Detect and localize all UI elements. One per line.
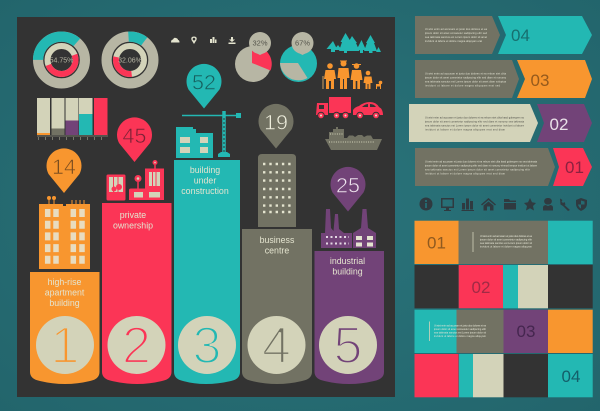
chart: pie 32%: 32% bbox=[252, 38, 268, 48]
bar 3: building under construction: 3 bbox=[193, 317, 221, 375]
pin: 25 bbox=[330, 167, 366, 212]
chart: donut 2: 32.06% bbox=[118, 58, 142, 64]
pin: 45: 45 bbox=[123, 124, 146, 148]
icon: star bbox=[524, 198, 536, 210]
grid row 3 bbox=[414, 310, 593, 353]
icon: person bbox=[543, 198, 553, 210]
grid row 1: ipsum dolor sit amet consetetur sadipscing elitr bbox=[480, 238, 532, 242]
arrow row 01: sea takimata sanctus est Lorem ipsum dolor sit amet consetetur sadipscing elitr bbox=[425, 168, 530, 172]
arrow row 04: 04 bbox=[511, 26, 530, 45]
icon: factory bbox=[321, 209, 376, 248]
icon: small bars bbox=[210, 37, 216, 43]
icon row bbox=[420, 198, 587, 211]
arrow row 01: ipsum dolor sit amet consetetur sadipscing elitr sed diam et nonumy eirmod tempor invidunt ut labore bbox=[425, 164, 538, 168]
bar 2: private ownership: ownership bbox=[113, 220, 153, 230]
chart: pie 32% bbox=[235, 32, 272, 82]
arrow row 01 bbox=[415, 148, 592, 186]
icon: location bbox=[191, 36, 197, 44]
grid row 3: Ut wisi enim ad accusam et justo duo dolores et ea bbox=[434, 324, 487, 328]
pin: 25: 25 bbox=[336, 174, 360, 198]
grid row 2 bbox=[414, 265, 593, 308]
arrow row 04: ipsum dolor sit amet consetetur sadipscing elitr sed bbox=[425, 32, 488, 35]
arrow row 02: invidunt ut labore et dolore magna aliquyam erat sed diam bbox=[425, 128, 505, 132]
icon: home bbox=[481, 198, 496, 210]
pin: 45 bbox=[117, 117, 152, 162]
chart: donut 2 bbox=[106, 36, 154, 84]
icon: apartment building bbox=[39, 196, 90, 269]
bar 2: private ownership: private bbox=[120, 210, 146, 220]
panel: dark chart panel bbox=[17, 17, 395, 397]
bar 4: business centre: business bbox=[260, 235, 295, 245]
arrow row 02: sea takimata sanctus est Lorem ipsum dolor sit amet consetetur invidunt ut labore bbox=[425, 124, 525, 128]
icon: truck bbox=[316, 97, 351, 119]
chart: stacked bars bbox=[37, 98, 108, 138]
icon: building and crane bbox=[176, 111, 241, 158]
bar 1: high-rise apartment building: 1 bbox=[51, 317, 79, 375]
bar 4: business centre: centre bbox=[265, 246, 289, 256]
arrow row 02: ipsum dolor sit amet consetetur sadipscing elitr sed diam et nonumy sea takimata bbox=[425, 120, 525, 124]
arrow row 03: ipsum dolor sit amet consetetur sadipscing elitr sed diam et nonumy bbox=[425, 76, 507, 80]
grid row 1: Ut wisi enim ad accusam et justo duo dolores et ea bbox=[480, 235, 533, 238]
bar 2: private ownership: 2 bbox=[122, 317, 151, 375]
arrow row 02: Ut wisi enim ad accusam et justo duo dolores et ea rebum stet clita kasd gubergren no bbox=[425, 116, 525, 120]
arrow row 04 bbox=[415, 16, 592, 54]
bar 1: high-rise apartment building: high-rise bbox=[48, 277, 81, 287]
icon: download bbox=[228, 37, 236, 44]
arrow row 01: Ut wisi enim ad accusam et justo duo dolores et ea rebum stet clita kasd gubergren no sea takimata bbox=[425, 160, 538, 164]
icon: trees bbox=[326, 33, 381, 53]
chart: pie 67%: 67% bbox=[295, 38, 310, 48]
pin: 52 bbox=[186, 64, 222, 108]
grid row 4 bbox=[414, 354, 593, 397]
icon: folder bbox=[504, 199, 516, 210]
icon: ship bbox=[325, 127, 382, 150]
grid row 3: invidunt ut labore et dolore magna aliquyam bbox=[434, 335, 486, 338]
icon: business tower bbox=[258, 154, 296, 227]
bar 3: building under construction: building bbox=[190, 165, 220, 175]
bar 5: industrial building: industrial bbox=[330, 256, 365, 266]
bar 1: high-rise apartment building: building bbox=[49, 298, 80, 308]
bar 2: private ownership bbox=[102, 203, 172, 384]
grid row 1 bbox=[414, 221, 593, 264]
arrow row 04: sea takimata sanctus est Lorem ipsum dolor sit amet bbox=[425, 36, 487, 39]
pin: 19: 19 bbox=[264, 110, 288, 134]
pin: 19 bbox=[258, 104, 294, 148]
icon: info bbox=[420, 198, 432, 210]
arrow row 01: 01 bbox=[565, 158, 584, 177]
grid row 3: sea takimata sanctus est Lorem ipsum dolor sit bbox=[434, 332, 486, 334]
pin: 52: 52 bbox=[192, 70, 216, 94]
chart: donut 1: 54.75% bbox=[50, 58, 73, 64]
bar 5: industrial building: building bbox=[332, 266, 363, 276]
chart: donut 1 bbox=[37, 36, 86, 84]
bar 4: business centre bbox=[242, 229, 312, 384]
arrow row 04: Ut wisi enim ad accusam et justo duo dolores et ea bbox=[425, 28, 488, 31]
icon: private houses bbox=[106, 160, 164, 200]
arrow row 03: invidunt ut labore et dolore magna aliquyam erat sed bbox=[425, 84, 501, 88]
icon: wrench bbox=[560, 198, 570, 211]
arrow row 04: invidunt ut labore et dolore magna aliquyam erat bbox=[425, 40, 482, 43]
bar 5: industrial building: 5 bbox=[334, 317, 362, 375]
arrow row 01: invidunt ut labore et dolore magna aliquyam erat sed diam bbox=[425, 172, 505, 176]
pin: 14 bbox=[46, 148, 82, 193]
grid row 1: sea takimata sanctus est Lorem ipsum dolor sit bbox=[480, 242, 532, 245]
grid row 4: 04 bbox=[562, 367, 580, 386]
bar 4: business centre: 4 bbox=[262, 317, 291, 375]
arrow row 03: sea takimata sanctus est Lorem ipsum dolor sit amet diam voluptua bbox=[425, 80, 507, 84]
arrow row 03: Ut wisi enim ad accusam et justo duo dolores et ea rebum stet clita bbox=[425, 72, 507, 76]
chart: pie 67% bbox=[280, 32, 317, 82]
icon: monitor bbox=[441, 198, 454, 211]
grid row 2: 02 bbox=[472, 278, 490, 297]
bar 3: building under construction: construction bbox=[181, 186, 229, 196]
arrow row 03 bbox=[415, 60, 592, 98]
arrow row 03: 03 bbox=[531, 71, 549, 90]
arrow row 02 bbox=[409, 104, 592, 142]
bar 3: building under construction bbox=[174, 160, 240, 384]
icon: car bbox=[353, 102, 383, 119]
grid row 3: 03 bbox=[517, 322, 535, 341]
pin: 14: 14 bbox=[52, 155, 76, 179]
bar 5: industrial building bbox=[314, 251, 384, 384]
icon: cloud bbox=[171, 38, 180, 42]
arrow row 02: 02 bbox=[550, 115, 568, 134]
bar 1: high-rise apartment building: apartment bbox=[45, 288, 85, 298]
grid row 1: invidunt ut labore et dolore magna aliquyam bbox=[480, 246, 532, 248]
grid row 1: 01 bbox=[427, 234, 446, 252]
icon: family bbox=[323, 60, 382, 89]
bar 3: building under construction: under bbox=[194, 176, 216, 186]
grid row 3: ipsum dolor sit amet consetetur sadipscing elitr bbox=[434, 328, 486, 331]
icon: bar chart bbox=[462, 198, 474, 211]
bar 1: high-rise apartment building bbox=[30, 272, 100, 384]
icon: shield bbox=[576, 198, 587, 211]
